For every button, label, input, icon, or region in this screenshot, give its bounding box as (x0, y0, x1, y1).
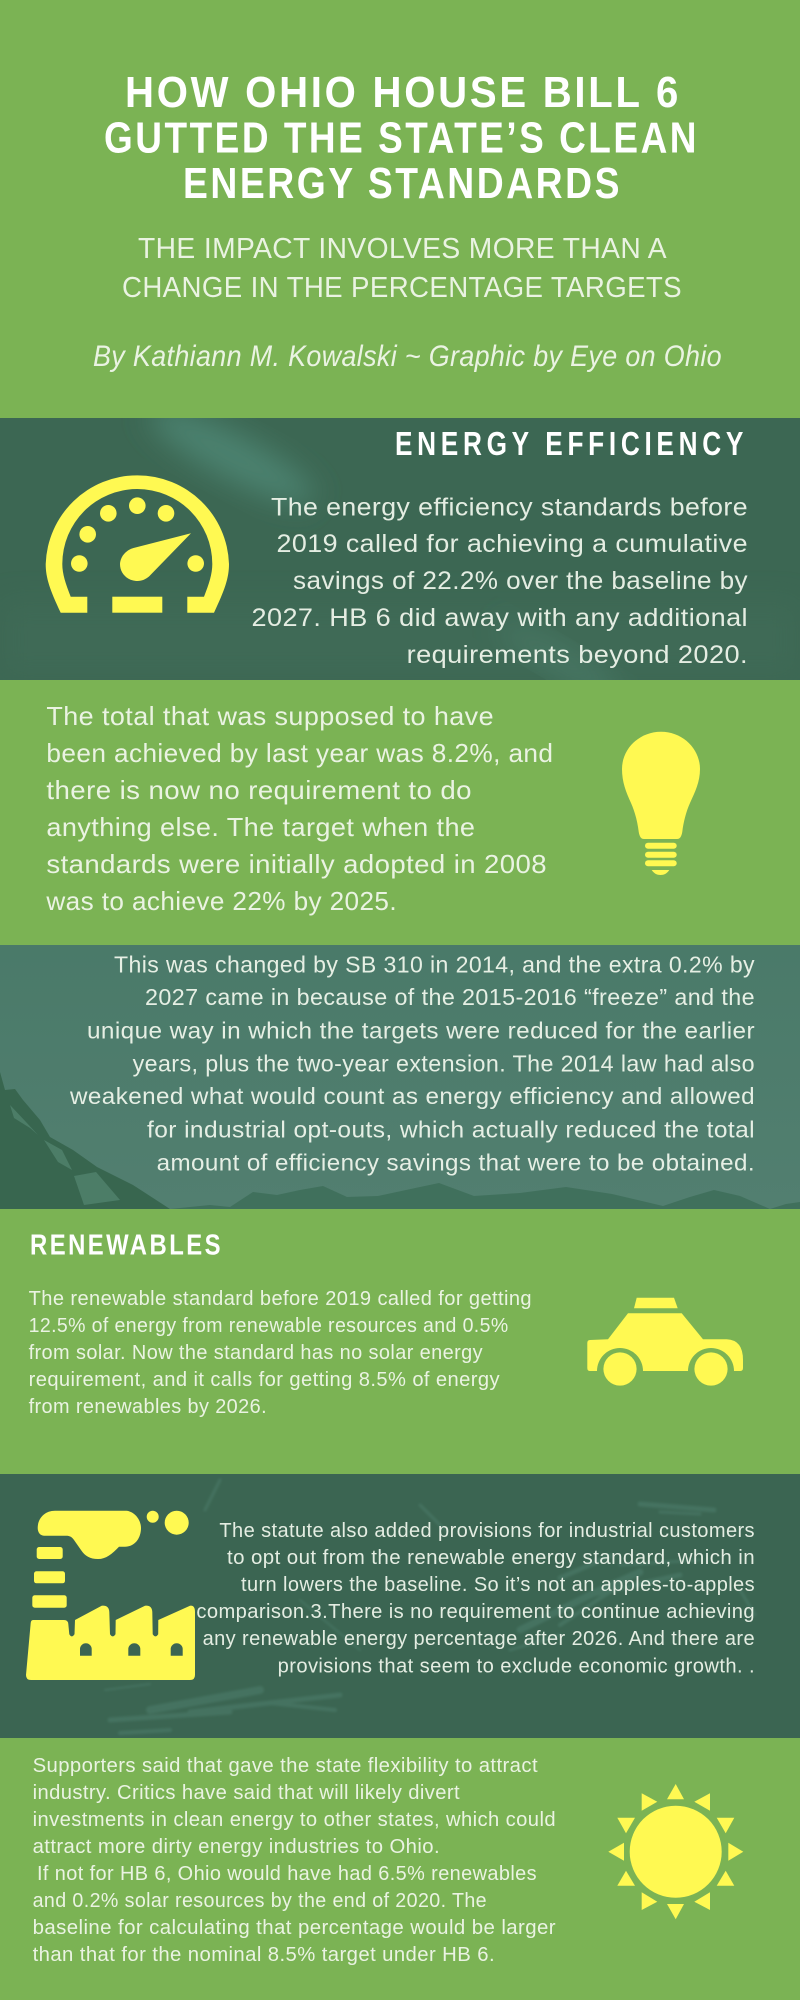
icon: gauge (46, 475, 229, 613)
heading: renewables: RENEWABLES (30, 1230, 223, 1262)
text block: supporters: industry. Critics have said that will likely divert (33, 1782, 460, 1804)
text block: SB 310: unique way in which the targets were reduced for the earlier (87, 1018, 755, 1044)
icon: car (587, 1298, 743, 1386)
text block: total target: The total that was supposed to have (46, 701, 494, 731)
panel: energy efficiency (0, 418, 800, 680)
text block: total target: standards were initially adopted in 2008 (46, 849, 547, 879)
title (104, 68, 699, 208)
text block: energy efficiency standards: The energy efficiency standards before (271, 494, 748, 522)
text block: SB 310: weakened what would count as energy efficiency and allowed (69, 1083, 755, 1109)
text block: energy efficiency standards (252, 494, 748, 669)
text block: renewable standard: The renewable standard before 2019 called for getting (29, 1288, 532, 1310)
text block: total target: was to achieve 22% by 2025. (45, 886, 397, 916)
background texture (105, 1480, 755, 1733)
text block: SB 310: amount of efficiency savings that were to be obtained. (157, 1149, 755, 1175)
text block: SB 310: for industrial opt-outs, which actually reduced the total (147, 1116, 755, 1142)
panel: title header (93, 68, 722, 373)
panel: SB 310 changes with mountains (0, 945, 800, 1209)
text block: statute: turn lowers the baseline. So it’s not an apples-to-apples (241, 1574, 755, 1596)
text block: renewable standard: from renewables by 2026. (29, 1396, 267, 1418)
text block: supporters: and 0.2% solar resources by the end of 2020. The (33, 1890, 487, 1912)
text block: statute: comparison.3.There is no requirement to continue achieving (196, 1601, 755, 1623)
text block: statute (196, 1520, 755, 1678)
title: ENERGY STANDARDS (183, 159, 622, 208)
mountains (0, 1072, 800, 1209)
subtitle: THE IMPACT INVOLVES MORE THAN A (138, 233, 667, 265)
byline: By Kathiann M. Kowalski ~ Graphic by Eye on Ohio (93, 340, 722, 373)
text block: supporters: baseline for calculating that percentage would be larger (33, 1917, 556, 1939)
icon: factory (26, 1511, 195, 1680)
text block: SB 310: 2027 came in because of the 2015-2016 “freeze” and the (145, 984, 755, 1010)
text block: statute: any renewable energy percentage after 2026. And there are (203, 1628, 755, 1650)
panel: renewables (0, 1209, 800, 1474)
text block: supporters: If not for HB 6, Ohio would have had 6.5% renewables (37, 1863, 537, 1885)
text block: energy efficiency standards: 2027. HB 6 did away with any additional (252, 604, 748, 632)
text block: total target: been achieved by last year was 8.2%, and (46, 738, 553, 768)
text block: SB 310: This was changed by SB 310 in 2014, and the extra 0.2% by (114, 952, 755, 978)
text block: supporters: investments in clean energy to other states, which could (33, 1809, 556, 1831)
text block: supporters: than that for the nominal 8.5% target under HB 6. (33, 1944, 495, 1966)
text block: energy efficiency standards: savings of 22.2% over the baseline by (293, 567, 748, 595)
icon: sun (608, 1784, 743, 1919)
text block: energy efficiency standards: requirements beyond 2020. (407, 641, 748, 669)
text block: SB 310 (69, 952, 755, 1175)
subtitle: CHANGE IN THE PERCENTAGE TARGETS (122, 272, 682, 304)
text block: supporters: attract more dirty energy industries to Ohio. (33, 1836, 440, 1858)
text block: total target: anything else. The target when the (46, 812, 475, 842)
title: GUTTED THE STATE’S CLEAN (104, 114, 699, 163)
text block: renewable standard: requirement, and it calls for getting 8.5% of energy (29, 1369, 500, 1391)
text block: renewable standard: from solar. Now the standard has no solar energy (29, 1342, 483, 1364)
icon: light bulb (622, 732, 700, 875)
text block: supporters (33, 1755, 556, 1966)
text block: renewable standard (29, 1288, 532, 1418)
panel: statute provisions (0, 1474, 800, 1738)
text block: energy efficiency standards: 2019 called for achieving a cumulative (276, 530, 748, 558)
panel: supporters and critics (0, 1738, 800, 2000)
text block: total target (45, 701, 553, 916)
panel: last year total (0, 680, 800, 945)
text block: statute: provisions that seem to exclude economic growth. . (278, 1656, 755, 1678)
text block: statute: The statute also added provisions for industrial customers (219, 1520, 755, 1542)
text block: total target: there is now no requirement to do (46, 775, 472, 805)
text block: supporters: Supporters said that gave the state flexibility to attract (33, 1755, 538, 1777)
title: HOW OHIO HOUSE BILL 6 (125, 68, 681, 117)
text block: renewable standard: 12.5% of energy from renewable resources and 0.5% (29, 1315, 509, 1337)
text block: SB 310: years, plus the two-year extension. The 2014 law had also (133, 1050, 755, 1076)
subtitle (122, 233, 682, 304)
text block: statute: to opt out from the renewable energy standard, which in (227, 1547, 755, 1569)
